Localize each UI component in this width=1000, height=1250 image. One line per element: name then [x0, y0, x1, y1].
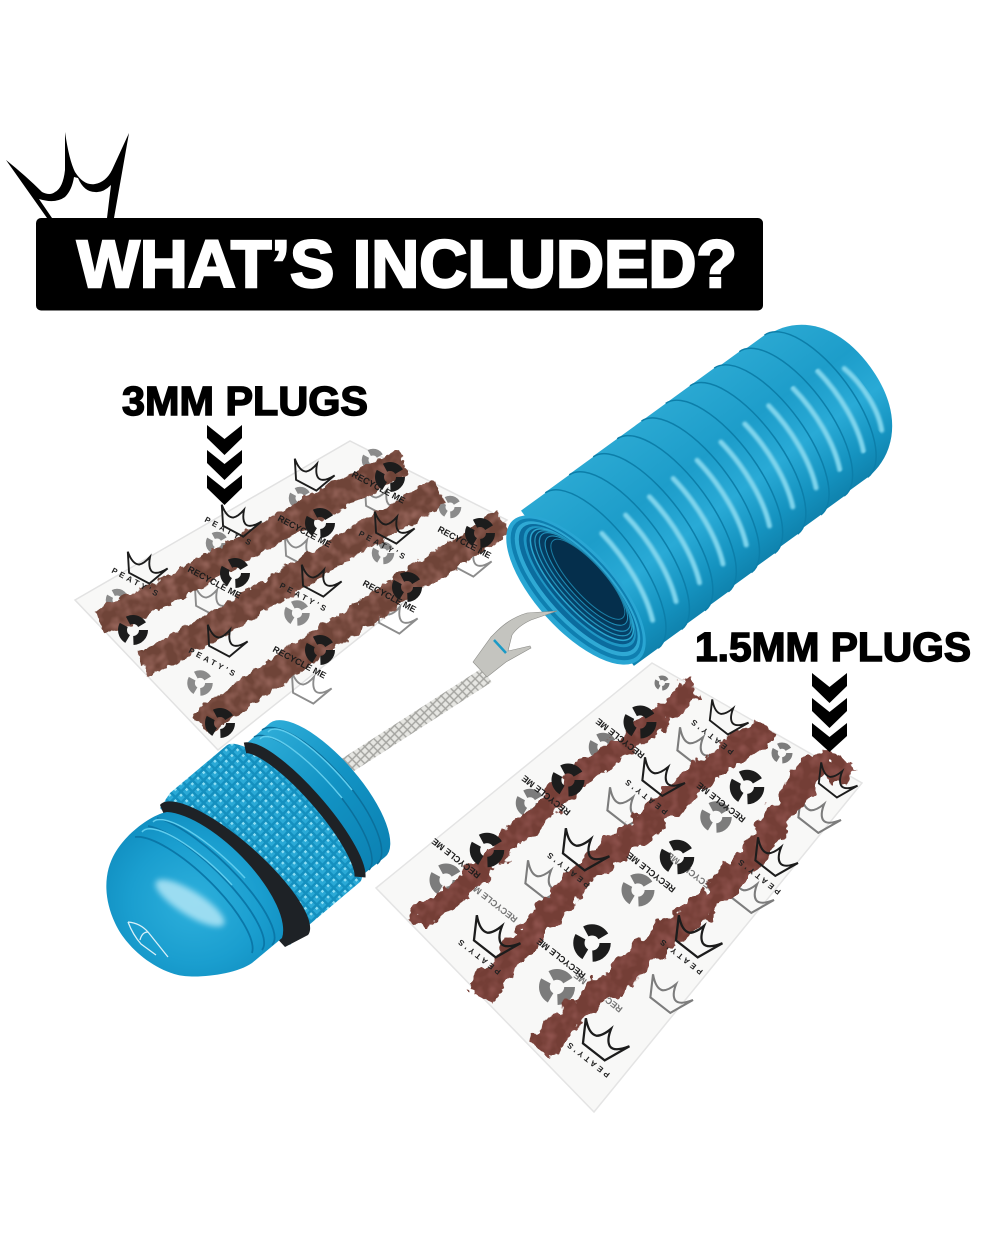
- faded print: RECYCLE ME: [467, 880, 519, 924]
- 1.5mm plug strips: [415, 690, 848, 1050]
- heading: WHAT’S INCLUDED?: [77, 227, 737, 302]
- arrow: 1.5mm chevrons: [812, 673, 847, 752]
- rounded far end: [765, 297, 922, 477]
- sheet text: RECYCLE ME: [594, 716, 646, 760]
- sheet text: PEATY'S: [203, 515, 255, 549]
- open threaded end: [483, 493, 669, 687]
- upper thread section: [247, 720, 390, 877]
- arrow: 3mm chevrons: [207, 425, 242, 505]
- sheet film: [75, 441, 507, 750]
- label: 3mm plugs: 3MM PLUGS: [122, 378, 368, 424]
- sheet text: RECYCLE ME: [695, 780, 747, 824]
- faded print: [109, 452, 493, 708]
- 3mm plug strips: [100, 463, 503, 725]
- sheet text: PEATY'S: [734, 856, 783, 896]
- sheet film: [376, 663, 862, 1112]
- sheet text: RECYCLE ME: [520, 773, 572, 817]
- sheet text: PEATY'S: [278, 581, 330, 615]
- panel: 3mm plugs sheet: [75, 441, 507, 750]
- sheet text: [110, 469, 493, 681]
- sheet text: [430, 716, 783, 1079]
- sheet text: RECYCLE ME: [430, 836, 482, 880]
- faded print: [434, 678, 842, 1019]
- ribbed tube body: [520, 293, 931, 666]
- faded print: RECYCLE ME: [665, 850, 717, 894]
- banner background: [36, 218, 763, 310]
- screw-on tube container: [483, 293, 931, 687]
- sheet text: RECYCLE ME: [350, 469, 407, 506]
- sheet text: PEATY'S: [357, 529, 409, 563]
- sheet text: RECYCLE ME: [625, 850, 677, 894]
- tool shank: [340, 675, 487, 770]
- faded print: RECYCLE ME: [572, 970, 624, 1014]
- dome crown logo: [128, 922, 168, 957]
- sheet text: RECYCLE ME: [535, 936, 587, 980]
- panel: 1.5mm plugs sheet: [376, 663, 862, 1112]
- sheet text: RECYCLE ME: [271, 644, 328, 681]
- sheet text: PEATY'S: [454, 936, 503, 976]
- sheet text: RECYCLE ME: [276, 513, 333, 550]
- crown logo: [6, 132, 129, 218]
- sheet text: PEATY'S: [543, 849, 592, 889]
- knurled ring: [160, 744, 362, 945]
- tool fork tip: [473, 611, 557, 677]
- black print: [119, 453, 490, 734]
- knurled shaft: [340, 675, 487, 770]
- sheet text: RECYCLE ME: [361, 578, 418, 615]
- sheet text: PEATY'S: [687, 716, 736, 756]
- slot reflection: [494, 640, 506, 653]
- title banner: [36, 218, 763, 310]
- sheet text: RECYCLE ME: [186, 564, 243, 601]
- sheet text: PEATY'S: [110, 566, 162, 600]
- dome and lower thread: [106, 812, 283, 976]
- lower o-ring: [160, 801, 310, 947]
- sheet text: PEATY'S: [656, 936, 705, 976]
- upper o-ring: [245, 748, 360, 877]
- sheet text: PEATY'S: [563, 1039, 612, 1079]
- black print: [464, 695, 859, 1067]
- sheet text: RECYCLE ME: [436, 524, 493, 561]
- threaded cap with tool: [106, 720, 390, 976]
- sheet text: PEATY'S: [187, 646, 239, 680]
- label: 1.5mm plugs: 1.5MM PLUGS: [695, 624, 971, 670]
- hook: [473, 611, 557, 677]
- sheet text: PEATY'S: [621, 776, 670, 816]
